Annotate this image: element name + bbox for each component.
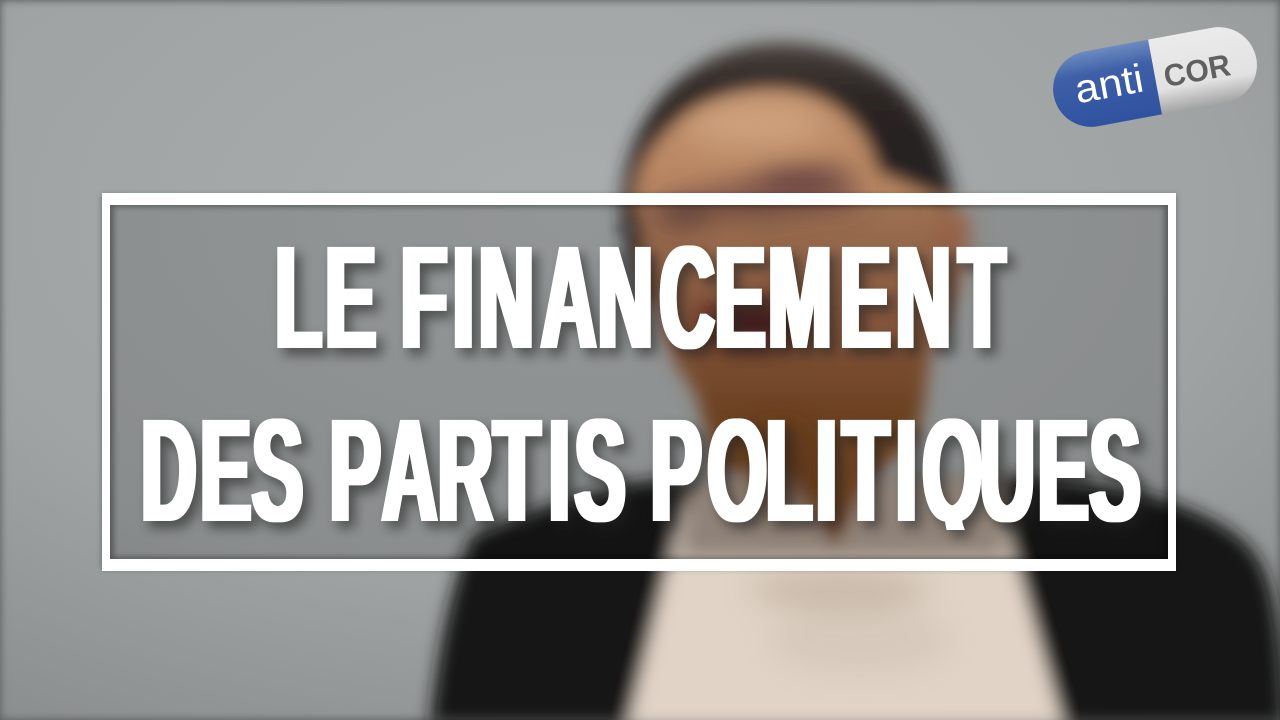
logo text COR: COR: [1161, 47, 1233, 94]
title frame: [102, 193, 1176, 571]
title: [143, 245, 1151, 544]
pill white half: [1148, 21, 1263, 114]
pill blue half: [1047, 39, 1163, 133]
title line 2: DES PARTIS POLITIQUES: [141, 388, 1140, 552]
logo: anticor pill: [1047, 21, 1263, 133]
logo text anti: anti: [1071, 57, 1147, 112]
title line 1: LE FINANCEMENT: [275, 215, 1005, 379]
frame interior dim: [110, 205, 1168, 559]
